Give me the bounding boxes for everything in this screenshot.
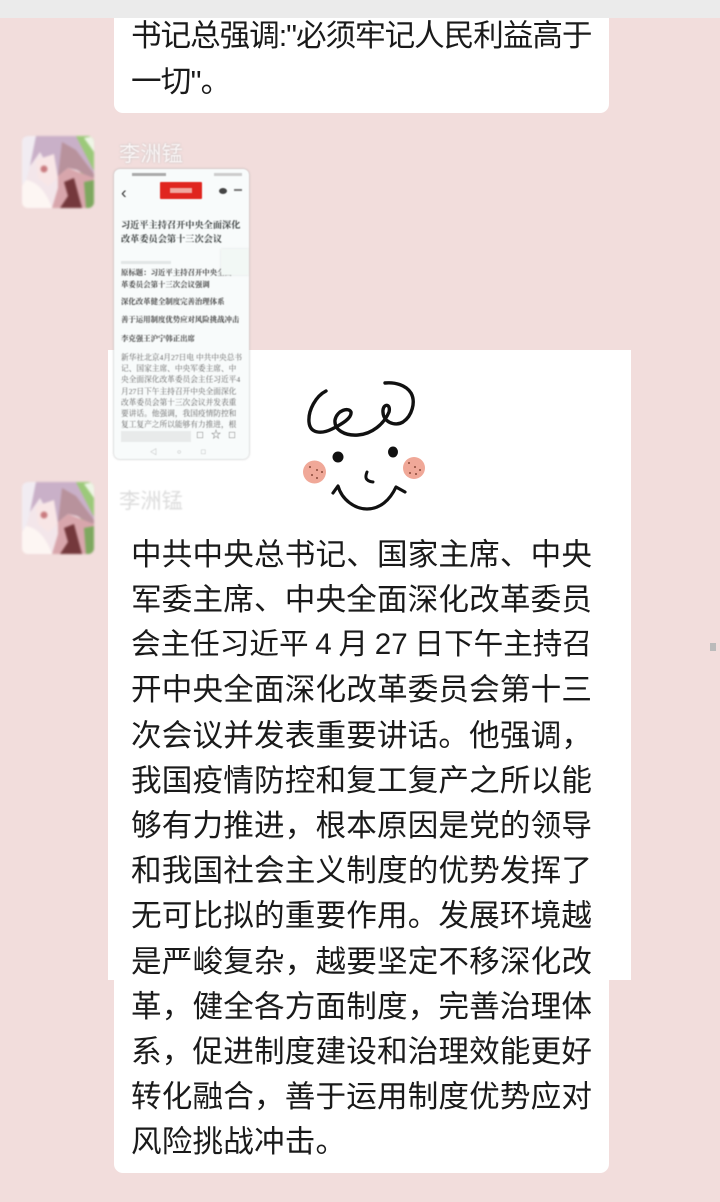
nav icons: ◁○□ <box>150 449 225 456</box>
mouth <box>333 486 405 509</box>
main message text: 风险挑战冲击。 <box>131 1125 346 1159</box>
article subhead 3: 善于运用制度优势应对风险挑战冲击 <box>121 315 239 324</box>
sender name 2: 李洲锰 <box>119 489 183 513</box>
main message text: 转化融合，善于运用制度优势应对 <box>131 1080 592 1114</box>
cheeks <box>303 457 425 484</box>
eyes <box>332 446 398 462</box>
article headline <box>120 219 241 244</box>
top status bar <box>0 0 720 18</box>
chat bubble: top message <box>114 18 609 113</box>
smiley face drawing <box>303 381 425 511</box>
main message text: 开中央全面深化改革委员会第十三 <box>131 673 592 707</box>
status line left <box>132 173 166 176</box>
hair curl <box>309 383 413 435</box>
article subhead 4: 李克强王沪宁韩正出席 <box>121 334 195 343</box>
sender name 1: 李洲锰 <box>119 142 183 166</box>
avatar 2 <box>22 480 96 556</box>
toolbar eye <box>219 188 227 194</box>
article subhead 1: 原标题：习近平主持召开中央全面 <box>121 268 232 277</box>
red logo <box>160 182 202 199</box>
freckles <box>309 462 421 479</box>
main message text: 够有力推进，根本原因是党的领导 <box>131 809 592 843</box>
main message text: 军委主席、中央全面深化改革委员 <box>131 583 592 617</box>
main message text: 和我国社会主义制度的优势发挥了 <box>131 854 592 888</box>
article subhead 2: 深化改革健全制度完善治理体系 <box>121 297 224 306</box>
status line right <box>214 173 242 176</box>
main message text: 革，健全各方面制度，完善治理体 <box>131 990 592 1024</box>
back arrow: ‹ <box>121 183 127 202</box>
article subhead 1 <box>120 268 232 289</box>
logo mark <box>170 188 192 193</box>
white pasted panel <box>108 350 631 980</box>
main message text: 是严峻复杂，越要坚定不移深化改 <box>131 945 592 979</box>
avatar 1 <box>22 134 96 210</box>
main message text: 我国疫情防控和复工复产之所以能 <box>131 764 592 798</box>
article headline: 改革委员会第十三次会议 <box>121 234 222 244</box>
toolbar icons: □☆□ <box>197 430 243 441</box>
article headline: 习近平主持召开中央全面深化 <box>121 220 240 230</box>
screenshot thumbnail of news article <box>114 169 249 459</box>
bubble text: 书记总强调:"必须牢记人民利益高于 <box>131 19 591 53</box>
main message text: 无可比拟的重要作用。发展环境越 <box>131 899 592 933</box>
phone widget <box>221 249 249 275</box>
comment bar <box>121 431 191 442</box>
nose <box>366 472 373 482</box>
date line <box>121 261 171 264</box>
scroll indicator <box>710 643 716 651</box>
main message text: 会主任习近平 4 月 27 日下午主持召 <box>131 628 592 661</box>
main message text: 中共中央总书记、国家主席、中央 <box>131 538 592 572</box>
bubble text second line: 一切"。 <box>131 65 230 99</box>
chat bubble: main message lower part <box>114 980 609 1173</box>
main message text: 次会议并发表重要讲话。他强调， <box>131 719 592 753</box>
toolbar dots <box>234 189 242 191</box>
main message text: 系，促进制度建设和治理效能更好 <box>131 1035 592 1069</box>
article subhead 1: 革委员会第十三次会议强调 <box>121 280 210 289</box>
